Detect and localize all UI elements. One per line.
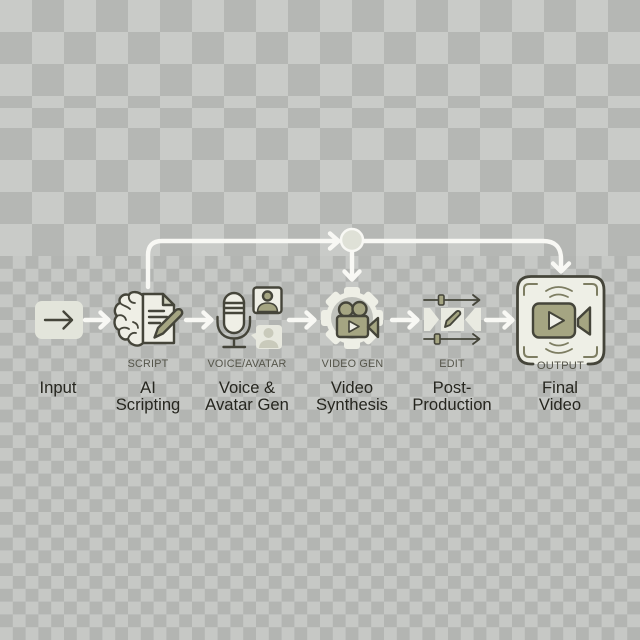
step: final video (517, 276, 604, 414)
arrow: hub to final video (362, 241, 569, 272)
icon: brain and document (115, 292, 182, 346)
icon: avatar speech bubble (251, 325, 282, 349)
label: Voice & Avatar Gen: Avatar Gen (205, 395, 289, 414)
label: Post-Production: Production (412, 395, 492, 414)
hub node (341, 229, 363, 251)
background: large checker band (0, 0, 640, 256)
arrow: script to voice (186, 312, 212, 328)
arrow: video to edit (392, 312, 418, 328)
label: Final Video: Final (542, 378, 578, 397)
tag: SCRIPT: SCRIPT (128, 358, 169, 370)
arrow: hub down to video synthesis (344, 251, 360, 280)
step: AI scripting (115, 292, 182, 414)
arrow: voice to video (289, 312, 314, 328)
icon: microphone (218, 293, 250, 347)
label: Video Synthesis: Synthesis (316, 395, 388, 414)
background: small checker band (0, 256, 640, 640)
step: video synthesis (316, 287, 388, 414)
step: input (35, 301, 83, 397)
step: voice and avatar (205, 288, 289, 414)
label: AI Scripting: Scripting (116, 395, 180, 414)
icon: edit timeline (424, 295, 481, 344)
icon: output frame (517, 276, 604, 364)
label: Video Synthesis: Video (331, 378, 373, 397)
tag: VOICE/AVATAR: VOICE/AVATAR (208, 358, 286, 370)
icon: gear with movie camera (321, 287, 383, 349)
branch connector: script to output via hub (148, 229, 569, 287)
step: post-production (412, 295, 492, 414)
label: Voice & Avatar Gen: Voice & (219, 378, 275, 397)
label: AI Scripting: AI (140, 378, 156, 397)
arrow: input to script (85, 312, 108, 328)
icon: avatar card (254, 288, 282, 313)
tag: EDIT: EDIT (439, 358, 465, 370)
tag: VIDEO GEN: VIDEO GEN (322, 358, 383, 370)
icon: input arrow tile (35, 301, 83, 339)
arrow: edit to final (486, 312, 512, 328)
label: Post-Production: Post- (433, 378, 471, 397)
label: Input: Input (40, 378, 77, 397)
arrow: script up to hub (148, 234, 338, 287)
tag: OUTPUT: OUTPUT (537, 360, 584, 372)
label: Final Video: Video (539, 395, 581, 414)
